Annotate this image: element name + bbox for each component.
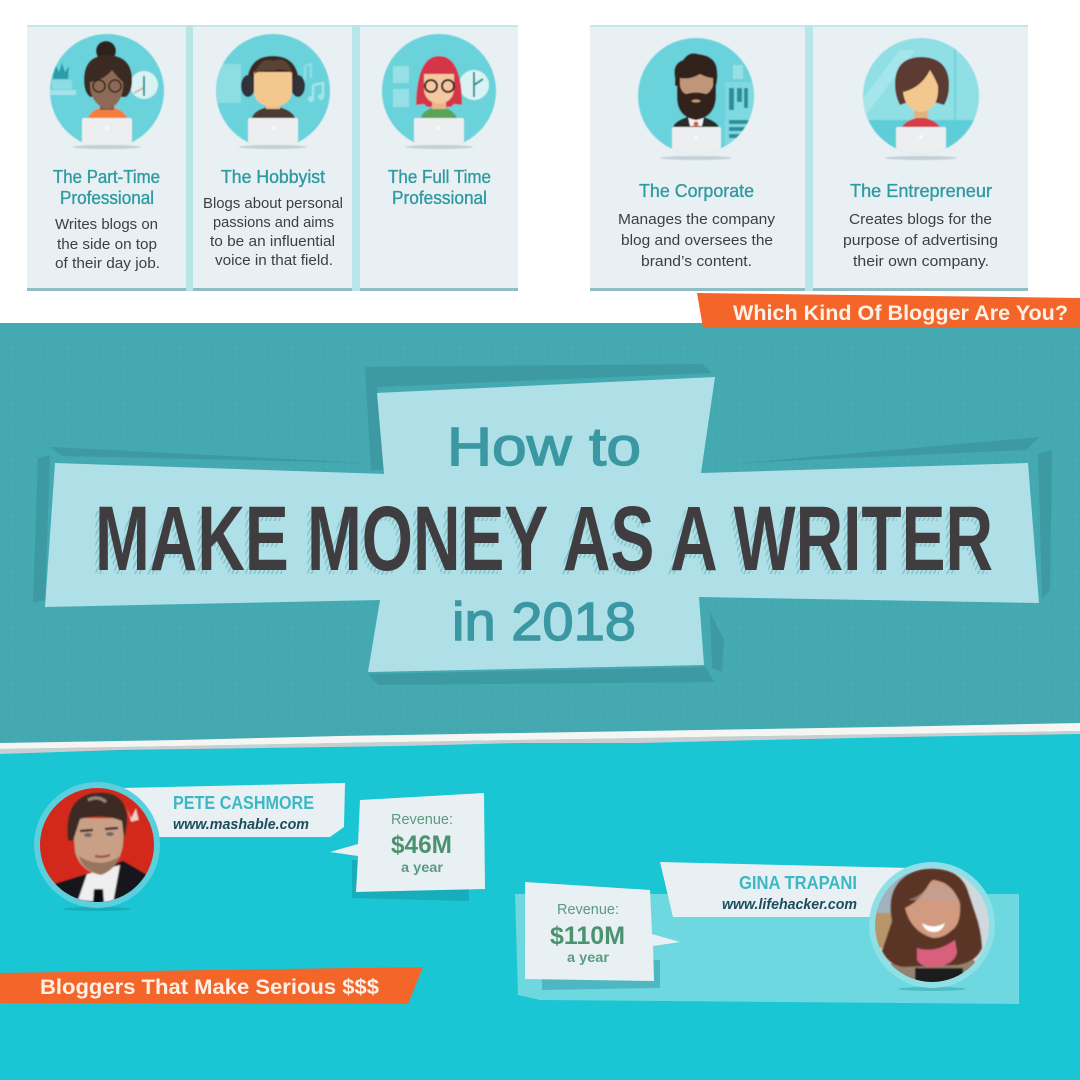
panel: hobbyist card — [193, 25, 352, 291]
description: Creates blogs for the — [849, 211, 992, 228]
how to: How to — [447, 417, 641, 477]
icon: entrepreneur avatar — [860, 38, 982, 160]
description: Blogs about personal — [203, 195, 343, 212]
portrait — [869, 862, 995, 991]
name tag: www.mashable.com — [173, 816, 309, 833]
panel: card gutter — [186, 25, 193, 291]
icon: hobbyist avatar — [214, 34, 330, 149]
revenue callout: a year — [567, 949, 610, 965]
blogger: Pete Cashmore — [34, 782, 485, 911]
description: passions and aims — [213, 214, 334, 231]
panel: full time professional card — [360, 25, 518, 291]
description: Writes blogs on — [55, 216, 158, 233]
name tag: www.lifehacker.com — [722, 896, 857, 913]
banner shadow — [33, 364, 1052, 685]
description: brand’s content. — [641, 253, 752, 270]
panel: entrepreneur card — [813, 25, 1028, 291]
revenue callout: $110M — [550, 922, 625, 950]
blogger: Gina Trapani — [515, 862, 1019, 1004]
heading — [53, 167, 160, 208]
description — [618, 211, 776, 270]
panel: corporate card — [590, 25, 805, 291]
panel: lower cyan section — [0, 732, 1080, 1080]
description: blog and oversees the — [621, 232, 773, 249]
description: purpose of advertising — [843, 232, 998, 249]
description: their own company. — [853, 253, 989, 270]
heading: The Full Time — [388, 167, 491, 187]
revenue callout — [330, 793, 485, 901]
description: to be an influential — [210, 233, 335, 250]
portrait — [34, 782, 160, 911]
icon: part-time professional avatar — [50, 34, 164, 149]
description: voice in that field. — [215, 252, 333, 269]
ribbon: bloggers that make serious money — [0, 967, 423, 1004]
name tag: GINA TRAPANI — [739, 873, 857, 893]
panel: card gutter — [805, 25, 813, 291]
description: the side on top — [57, 236, 157, 253]
revenue callout: Revenue: — [391, 811, 453, 828]
description — [843, 211, 998, 270]
heading — [388, 167, 491, 208]
name tag — [123, 783, 345, 837]
panel: header background — [0, 323, 1080, 753]
ribbon: which kind of blogger — [697, 293, 1080, 328]
in 2018: in 2018 — [452, 592, 636, 652]
panel: card gutter — [352, 25, 360, 291]
description: of their day job. — [55, 255, 160, 272]
heading: Professional — [60, 188, 154, 208]
revenue callout: Revenue: — [557, 901, 619, 918]
heading: The Hobbyist — [221, 167, 325, 187]
ribbon: which kind of blogger: Which Kind Of Blogger Are You? — [733, 302, 1068, 325]
light background panel — [515, 894, 1019, 1004]
name tag: PETE CASHMORE — [173, 793, 314, 813]
heading: The Corporate — [639, 181, 754, 201]
icon: corporate avatar — [638, 38, 757, 160]
ribbon: bloggers that make serious money: Bloggers That Make Serious $$$ — [40, 976, 379, 999]
revenue callout: $46M — [391, 831, 452, 859]
name tag — [660, 862, 910, 917]
description: Manages the company — [618, 211, 776, 228]
description — [55, 216, 160, 272]
revenue callout: a year — [401, 859, 444, 875]
heading: Professional — [392, 188, 487, 208]
revenue callout — [525, 882, 680, 990]
heading: The Part-Time — [53, 167, 160, 187]
icon: full time professional avatar — [382, 34, 496, 149]
title banner — [33, 364, 1052, 685]
heading: The Entrepreneur — [850, 181, 992, 201]
torn paper edge — [0, 723, 1080, 754]
banner shape — [45, 377, 1039, 672]
panel: part-time professional card — [27, 25, 186, 291]
description — [203, 195, 343, 269]
